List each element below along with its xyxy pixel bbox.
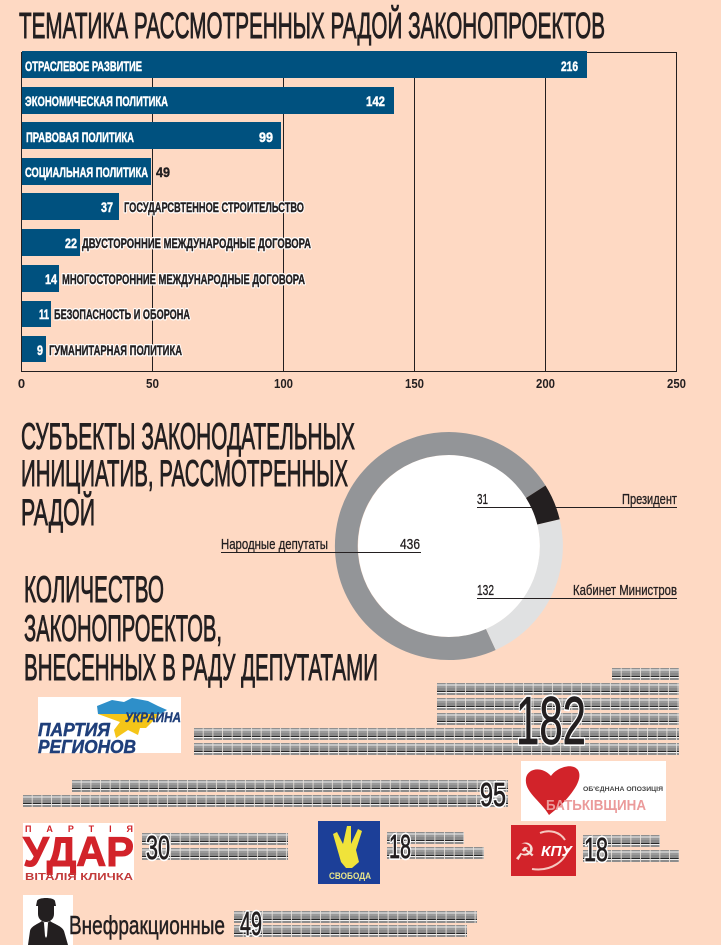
bar: legal policy [22,122,281,149]
x axis labels: 200 [536,376,555,391]
bar: bilateral treaties: 22 [65,236,77,251]
callout: president: 31 [477,492,488,508]
heading: subjects of legislative initiative: СУБЪЕКТЫ ЗАКОНОДАТЕЛЬНЫХ [21,416,355,457]
pictogram: KPU 18: 18 [584,831,608,868]
x axis labels: 100 [274,376,293,391]
logo: KPU: КПУ [541,843,574,860]
logo: Batkivshchyna: БАТЬКІВЩИНА [546,797,646,814]
logo: KPU [511,825,576,876]
bar: security and defence: 11 [39,307,49,322]
bar: humanitarian policy [22,336,182,362]
logo: Party of Regions: ПАРТИЯ [38,720,111,740]
bar: state building: ГОСУДАРСВТЕННОЕ СТРОИТЕЛЬСТВО [124,200,304,215]
bar: economic policy [22,87,394,114]
heading: number of bills by deputies: ВНЕСЕННЫХ В РАДУ ДЕПУТАТАМИ [24,647,378,688]
callout: president: Президент [622,492,677,508]
x axis labels: 0 [18,376,25,391]
pictogram: Party of Regions 182: 182 [516,683,586,759]
logo: Party of Regions: РЕГИОНОВ [38,737,136,757]
logo: Party of Regions: УКРАИНА [125,710,181,725]
bar: multilateral treaties [22,265,305,292]
donut chart [221,432,677,660]
logo: KPU: ☭ [514,838,536,866]
heading: subjects of legislative initiative [21,416,355,533]
bar: social policy: 49 [156,165,170,180]
x axis labels [18,376,686,391]
bar: state building [22,193,304,220]
bar: security and defence: БЕЗОПАСНОСТЬ И ОБОРОНА [54,307,190,322]
pictogram: KPU 18: 18 [584,831,608,868]
bar: bilateral treaties [22,229,311,256]
pictogram: Svoboda 18 [387,828,484,865]
callout: president [477,492,677,508]
pictogram: Batkivshchyna 95: 95 [480,776,506,813]
bar chart: topics of bills [18,51,686,391]
segment: president [526,486,560,524]
bar: state building: 37 [101,200,113,215]
bar: social policy [22,158,170,185]
bar: sector development: 216 [561,59,578,74]
bar: security and defence: БЕЗОПАСНОСТЬ И ОБОРОНА [54,307,190,322]
bar: humanitarian policy: ГУМАНИТАРНАЯ ПОЛИТИКА [49,343,182,358]
logo: Svoboda: СВОБОДА [329,871,371,881]
heading: number of bills by deputies [24,569,378,688]
logo: Svoboda [318,821,380,884]
pictogram: KPU 18 [583,831,679,868]
bar: multilateral treaties: МНОГОСТОРОННИЕ МЕЖДУНАРОДНЫЕ ДОГОВОРА [62,272,305,287]
logo: Batkivshchyna: ОБ'ЄДНАНА ОПОЗИЦІЯ [583,786,663,793]
callout: people's deputies [221,537,421,553]
heading: subjects of legislative initiative: РАДОЙ [21,491,95,533]
pictogram: independents 49: 49 [240,905,262,942]
pictogram: UDAR 30: 30 [146,829,170,866]
pictogram: Party of Regions 182: 182 [516,683,586,759]
logo: UDAR: ВІТАЛІЯ КЛИЧКА [25,872,133,883]
heading: subjects of legislative initiative: ИНИЦИАТИВ, РАССМОТРЕННЫХ [21,453,348,494]
bar: sector development [22,51,587,78]
heading: number of bills by deputies: ЗАКОНОПРОЕКТОВ, [24,608,222,649]
icon: independent deputy silhouette [23,895,73,945]
x axis labels: 250 [667,376,686,391]
pictogram: Batkivshchyna 95 [23,776,508,813]
callout: people's deputies: Народные депутаты [221,537,328,553]
callout: cabinet of ministers: Кабинет Министров [573,583,677,599]
bar: humanitarian policy: 9 [37,343,43,358]
bar: bilateral treaties: ДВУСТОРОННИЕ МЕЖДУНАРОДНЫЕ ДОГОВОРА [82,236,311,251]
bar: legal policy: ПРАВОВАЯ ПОЛИТИКА [26,130,134,145]
pictogram: UDAR 30 [142,829,288,866]
pictogram: Party of Regions 182 [194,668,679,759]
segment: cabinet [486,519,563,650]
logo: Batkivshchyna [521,761,666,821]
x axis labels: 50 [146,376,159,391]
pictogram: Svoboda 18: 18 [389,828,411,865]
pictogram: independents 49: 49 [240,905,262,942]
pictogram: UDAR 30: 30 [146,829,170,866]
pictogram: Svoboda 18: 18 [389,828,411,865]
bar: multilateral treaties: 14 [45,272,57,287]
bar: state building: ГОСУДАРСВТЕННОЕ СТРОИТЕЛЬСТВО [124,200,304,215]
callout: people's deputies: 436 [400,537,420,553]
logo: UDAR: УДАР [23,828,134,875]
bar: legal policy: 99 [259,130,273,145]
pictogram: independents 49 [234,905,477,942]
chart grid [22,52,676,372]
bar: humanitarian policy: ГУМАНИТАРНАЯ ПОЛИТИКА [49,343,182,358]
logo: UDAR: ПАРТІЯ [25,824,133,834]
bar: multilateral treaties: МНОГОСТОРОННИЕ МЕЖДУНАРОДНЫЕ ДОГОВОРА [62,272,305,287]
bar: sector development: ОТРАСЛЕВОЕ РАЗВИТИЕ [25,59,142,74]
bar: economic policy: 142 [366,94,385,109]
bar: social policy: СОЦИАЛЬНАЯ ПОЛИТИКА [25,165,148,180]
label: independents: Внефракционные [69,910,225,940]
pictogram: Batkivshchyna 95: 95 [480,776,506,813]
segment: deputies [335,432,546,660]
callout: cabinet of ministers [477,583,677,599]
callout: cabinet of ministers: 132 [477,583,494,599]
bar: bilateral treaties: ДВУСТОРОННИЕ МЕЖДУНАРОДНЫЕ ДОГОВОРА [82,236,311,251]
bar: security and defence [22,301,190,327]
x axis labels: 150 [405,376,424,391]
heading: number of bills by deputies: КОЛИЧЕСТВО [24,569,164,610]
logo: Party of Regions [38,697,181,757]
bar: economic policy: ЭКОНОМИЧЕСКАЯ ПОЛИТИКА [25,94,168,109]
